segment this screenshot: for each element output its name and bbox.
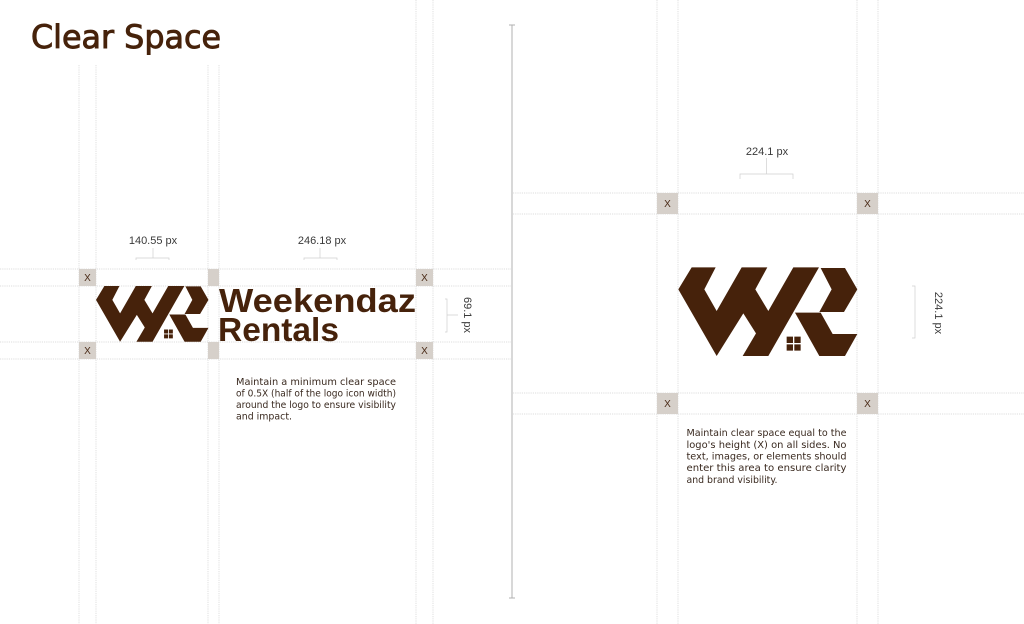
text block: clear space rule xyxy=(686,428,847,486)
dimension: icon width: 140.55 px xyxy=(129,235,178,247)
dimension: icon width: 224.1 px xyxy=(746,146,789,158)
panel divider: vertical rule xyxy=(509,25,515,598)
text block: clear space rule: Maintain clear space equal to the xyxy=(686,428,847,439)
clear space markers: horizontal logo: X xyxy=(421,273,428,284)
clear space markers: icon logo xyxy=(657,193,878,414)
text block: minimum clear space: around the logo to ensure visibility xyxy=(236,400,396,411)
clear space markers: horizontal logo: X xyxy=(421,346,428,357)
panel: horizontal logo clear space xyxy=(79,235,473,422)
logo icon: large xyxy=(678,267,857,356)
clear space markers: horizontal logo: X xyxy=(84,346,91,357)
text block: clear space rule: text, images, or elements should xyxy=(686,452,847,462)
text block: clear space rule: enter this area to ensure clarity xyxy=(686,463,847,474)
logo wordmark xyxy=(218,282,416,348)
dimension: logo height: 69.1 px xyxy=(461,297,473,334)
dimension: wordmark width: 246.18 px xyxy=(298,235,347,247)
text block: minimum clear space: of 0.5X (half of the logo icon width) xyxy=(236,388,396,400)
clear space markers: icon logo: X xyxy=(864,399,871,410)
text block: clear space rule: and brand visibility. xyxy=(686,475,778,486)
text block: minimum clear space: and impact. xyxy=(236,412,292,422)
logo wordmark: Rentals xyxy=(218,311,339,348)
title: Clear Space xyxy=(31,18,221,56)
dimension: icon width xyxy=(129,235,178,260)
text block: minimum clear space: Maintain a minimum clear space xyxy=(236,377,396,388)
clear space markers: horizontal logo: X xyxy=(84,273,91,284)
logo icon: horizontal lockup xyxy=(96,286,208,342)
clear space markers: horizontal logo xyxy=(79,269,433,359)
dimension: icon height: 224.1 px xyxy=(932,292,944,335)
clear space markers: icon logo: X xyxy=(664,399,671,410)
dimension: wordmark width xyxy=(298,235,347,260)
dimension: icon width xyxy=(740,146,793,179)
clear space markers: icon logo: X xyxy=(664,199,671,210)
text block: minimum clear space xyxy=(236,377,396,422)
clear space markers: icon logo: X xyxy=(864,199,871,210)
panel: stacked icon clear space xyxy=(657,146,944,486)
logo wordmark: Weekendaz xyxy=(219,282,416,319)
dimension: icon height xyxy=(912,286,944,338)
text block: clear space rule: logo's height (X) on all sides. No xyxy=(686,440,847,451)
dimension: logo height xyxy=(445,297,473,334)
